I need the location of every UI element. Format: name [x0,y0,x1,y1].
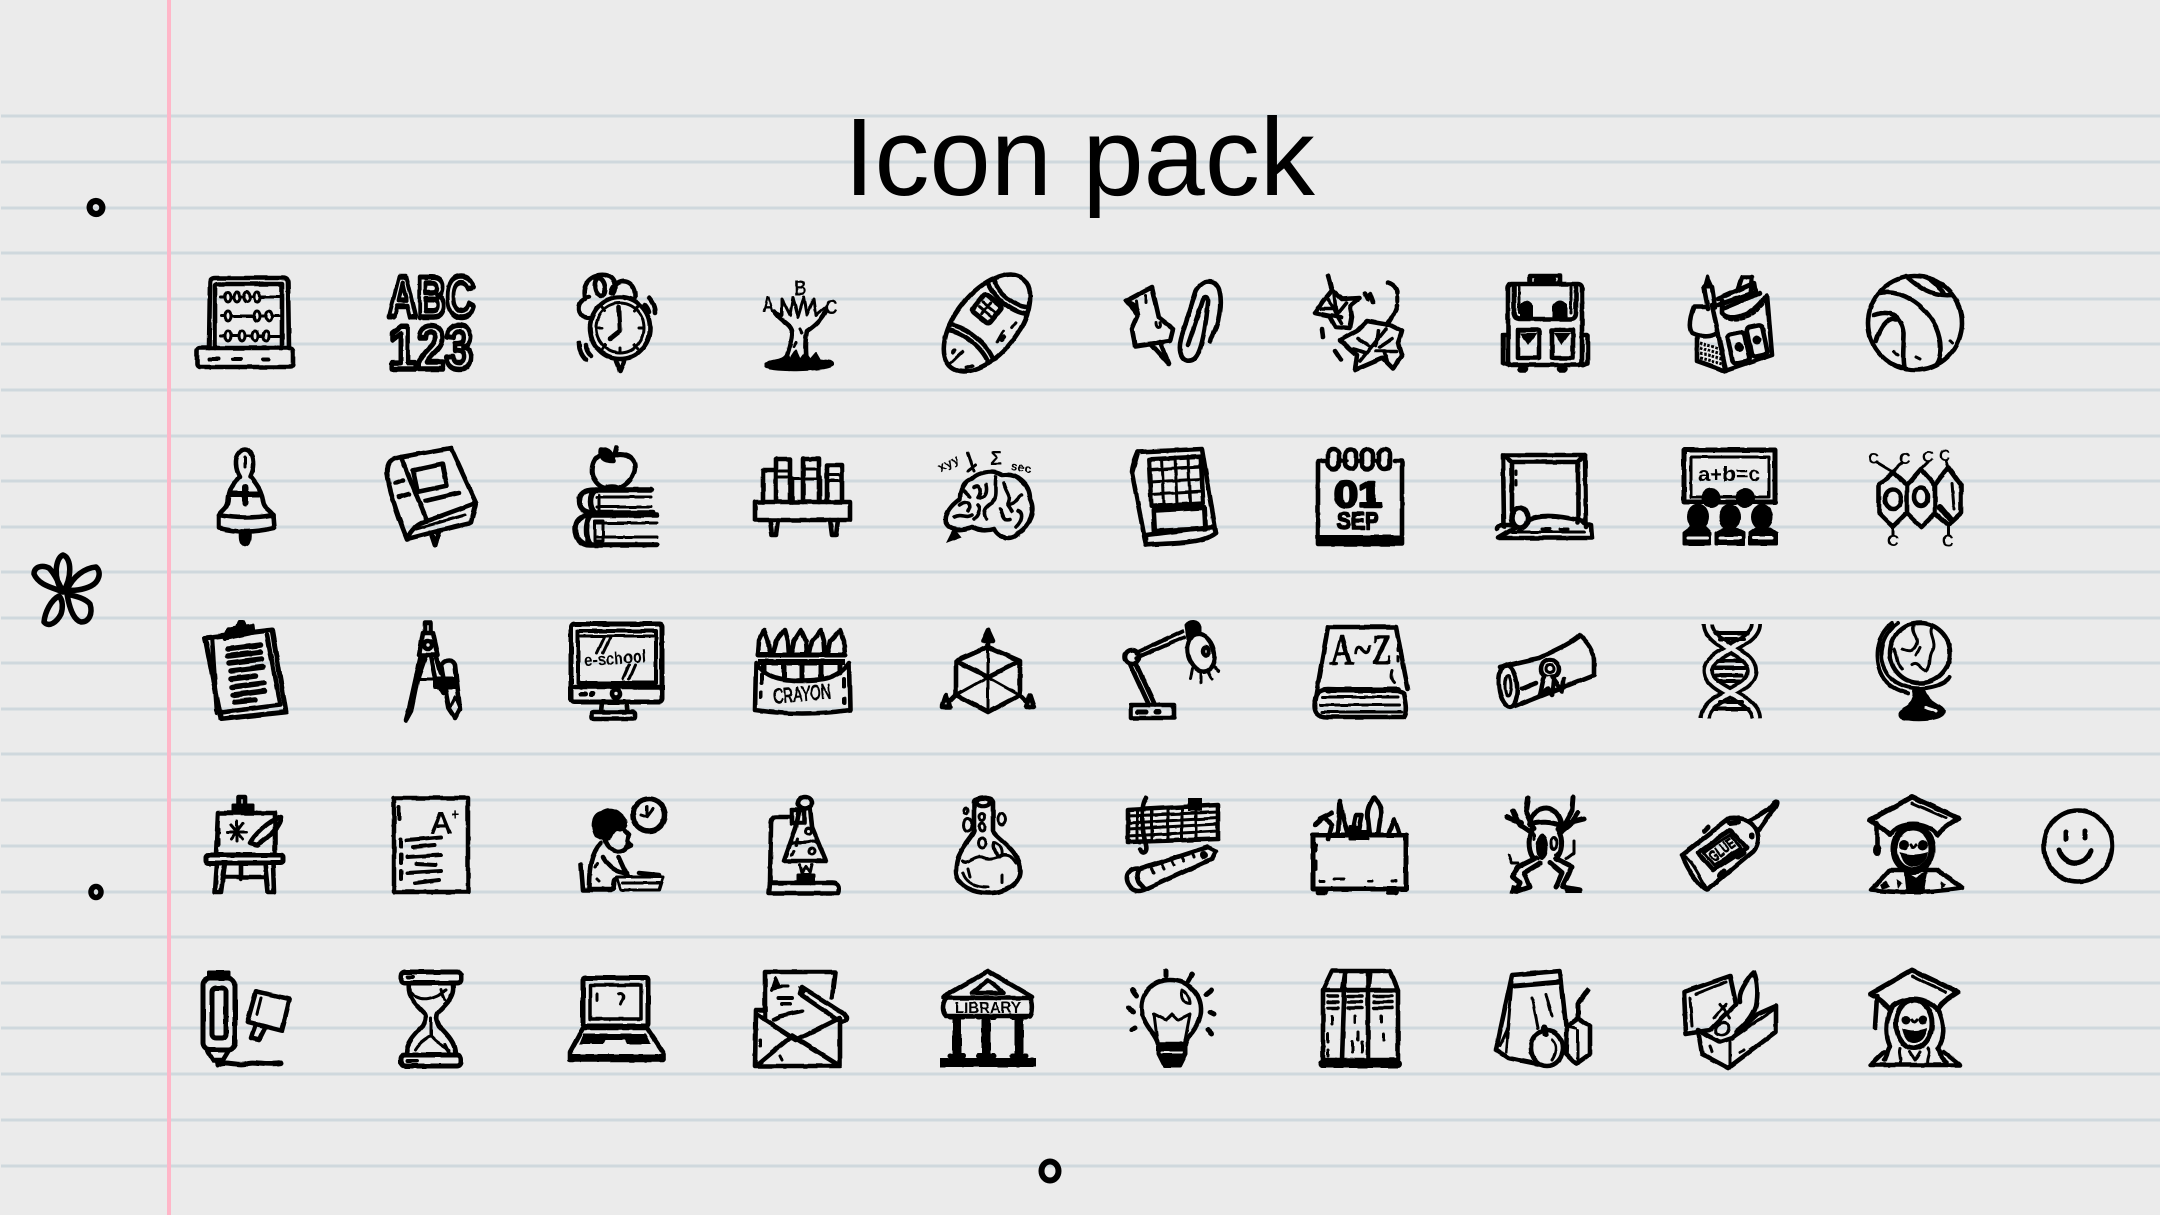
icon: e-school monitor: e-school [583,647,647,670]
icon: tree with letters: C [825,297,837,319]
icon: book with bookmark [387,448,476,545]
icon: chemical structure: C [1939,448,1951,465]
icon: marker and cap [203,972,290,1065]
icon: frog [1507,797,1584,894]
icon: glue bottle [1682,802,1777,890]
icon: chemical structure: C [1868,451,1880,468]
icon: autumn leaves [1315,276,1402,370]
icon: tree with letters [762,277,837,370]
icon: brain with formulas [935,448,1033,543]
icon grid [197,259,2112,1068]
icon: studying student [581,799,665,890]
icon: classroom board [1684,450,1776,544]
icon: abacus [197,278,293,367]
icon: graded test paper [394,798,468,892]
icon: lunch box [1684,972,1776,1068]
icon: graded test paper: A [431,807,451,840]
icon: hand bell [219,450,274,544]
icon: light bulb [1129,971,1214,1066]
icon: bookshelf [755,459,850,535]
icon: calendar: SEP [1337,508,1379,535]
icon: crayon box: CRAYON [772,681,832,708]
icon: tree with letters: B [794,277,807,300]
icon: chalkboard [1497,455,1592,538]
icon: push pin and paperclip [1126,282,1220,364]
icon: lunch bag [1496,971,1590,1066]
icon: apple on books [575,447,657,545]
icon: library building [940,971,1036,1067]
icon: basketball [1868,276,1962,370]
icon: brain with formulas: xyy [935,451,962,475]
icon: calendar: 01 [1334,474,1382,515]
doodle: smiley face [2044,810,2112,882]
icon: flask on microscope [769,797,839,893]
icon: alarm clock [579,275,655,371]
icon: classroom board: a+b=c [1698,464,1760,486]
doodle: ring top left [87,199,105,216]
icon: chemical structure: C [1887,533,1899,550]
icon: backpack [1503,276,1588,369]
icon: laptop [570,978,663,1060]
icon: desk lamp [1125,621,1219,718]
icon: letter and envelope [755,972,846,1066]
icon: chemical structure: C [1899,451,1911,468]
icon: ABC 123: 123 [389,314,473,383]
icon: graded test paper: + [451,806,459,822]
icon: ABC 123: ABC [388,265,475,330]
icon: hourglass [401,972,461,1066]
icon: A-Z book: A~Z [1330,628,1392,674]
icon: ABC 123 [388,265,475,383]
icon: calculator [1132,449,1216,545]
icon: school bag with supplies [1690,276,1772,371]
icon: easel [206,797,283,892]
icon: brain with formulas: sec [1009,458,1033,476]
icon: e-school monitor [571,624,662,719]
icon: brain with formulas: Σ [990,448,1002,470]
icon: american football [927,259,1047,387]
icon: library building: LIBRARY [955,1000,1021,1017]
icon: globe [1877,623,1950,720]
title: Icon pack [844,96,1316,219]
icon: diploma [1497,635,1594,708]
icon: 3D cube [942,630,1034,712]
doodle: flower [34,555,99,624]
icon: drawing compass [406,623,460,720]
icon: calendar [1318,449,1402,544]
icon: clipboard [205,622,286,719]
doodle: ring lower left [91,886,101,898]
icon: chemical structure [1868,448,1961,550]
icon: chemical structure: C [1922,449,1934,466]
icon: tree with letters: A [762,292,774,317]
icon: A-Z book [1315,627,1408,717]
icon: round flask [956,798,1020,893]
icon: crayon box [755,630,850,714]
icon: graduate boy [1870,797,1962,893]
icon: box of school tools [1313,797,1406,893]
icon: lockers [1322,971,1398,1064]
doodle: ring bottom [1042,1162,1058,1180]
icon: glue bottle: GLUE [1706,835,1739,866]
icon: music sheet and flute [1127,798,1218,891]
icon: DNA [1705,624,1756,718]
icon: graduate girl [1870,970,1960,1065]
icon: chemical structure: C [1942,533,1954,550]
